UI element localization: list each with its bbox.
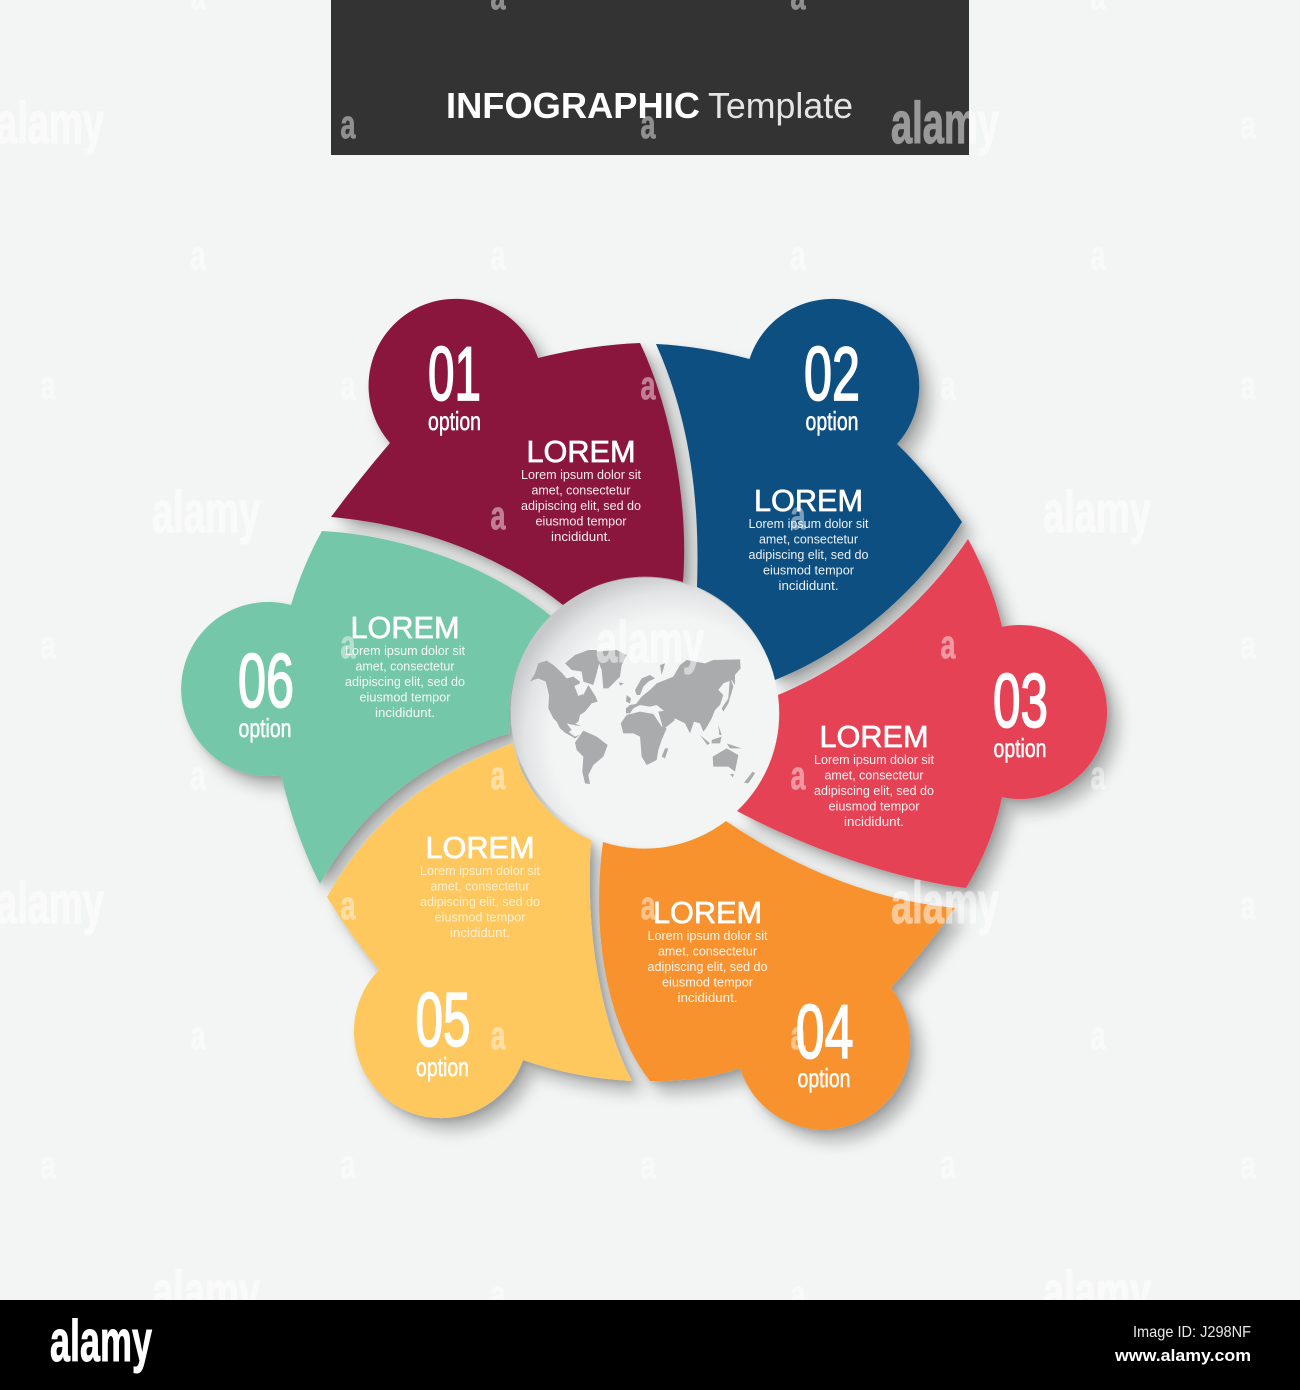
label option: option [994,733,1046,763]
body text: amet, consectetur [824,768,924,782]
body text: adipiscing elit, sed do [521,499,641,513]
heading: LOREM [526,434,636,469]
watermark overlay: a [490,754,506,798]
body text: Lorem ipsum dolor sit [748,517,869,531]
center circle with world map [510,578,778,846]
number 05: 05 [416,978,470,1063]
watermark overlay: a [490,1014,506,1058]
body text: adipiscing elit, sed do [814,784,934,798]
watermark overlay: a [640,103,656,147]
watermark overlay: a [340,103,356,147]
number 03: 03 [993,659,1048,744]
label option: option [798,1063,850,1093]
body text: eiusmod tempor [360,690,450,704]
world map: Americas and Greenland [530,650,627,784]
title: Template [708,85,853,126]
body text: amet, consectetur [430,880,530,894]
watermark overlay: alamy [0,91,104,156]
watermark overlay: a [1240,1143,1256,1187]
number 06: 06 [238,639,294,724]
body text: incididunt. [375,706,435,720]
watermark overlay: a [190,1014,206,1058]
watermark overlay: a [640,884,656,928]
body text: amet, consectetur [759,532,858,546]
heading: LOREM [426,830,534,865]
body text: amet, consectetur [658,944,757,958]
body text: Lorem ipsum dolor sit [345,644,466,658]
body text: adipiscing elit, sed do [748,548,869,562]
watermark overlay: a [1090,754,1106,798]
petal wheel [181,299,1107,1129]
body text: incididunt. [450,926,510,940]
watermark overlay: a [1090,1014,1106,1058]
watermark overlay: a [1240,623,1256,667]
heading: LOREM [820,719,928,754]
body text: Lorem ipsum dolor sit [521,468,642,482]
watermark overlay: a [1240,103,1256,147]
website: www.alamy.com [1114,1346,1251,1365]
label option: option [238,713,292,743]
body text: eiusmod tempor [536,514,626,528]
panel shape 03 [737,539,1107,888]
watermark overlay: a [490,234,506,278]
option 03 [814,659,1048,829]
body text [648,929,768,1005]
body text [420,864,541,940]
body text: amet, consectetur [532,484,630,498]
watermark overlay: a [640,1143,656,1187]
body text: adipiscing elit, sed do [420,895,540,909]
watermark overlay: a [490,494,506,538]
watermark overlay: a [1240,364,1256,408]
body text: Lorem ipsum dolor sit [814,753,935,767]
body text: Lorem ipsum dolor sit [648,929,768,943]
title: INFOGRAPHIC [446,85,700,126]
watermark overlay: a [1090,234,1106,278]
heading: LOREM [653,895,762,930]
body text: eiusmod tempor [828,800,920,814]
watermark overlay: alamy [596,610,704,675]
body text: eiusmod tempor [662,976,753,990]
watermark overlay: a [340,623,356,667]
body text [814,753,935,829]
option 06 [238,610,466,743]
heading: LOREM [350,610,460,645]
panel shape 05 [327,743,632,1118]
watermark overlay: alamy [891,871,999,936]
body text [748,517,869,593]
watermark overlay: a [340,884,356,928]
watermark overlay: alamy [1043,1260,1151,1325]
watermark overlay: a [940,1143,956,1187]
body text: adipiscing elit, sed do [648,960,768,974]
watermark overlay: a [40,364,56,408]
body text: eiusmod tempor [763,564,854,578]
watermark overlay: a [40,623,56,667]
watermark overlay: a [790,1273,806,1317]
label option: option [416,1052,469,1082]
watermark overlay: a [1240,884,1256,928]
watermark overlay: a [940,364,956,408]
body text: amet, consectetur [356,660,454,674]
header banner [331,0,969,155]
panel shape 06 [181,531,552,884]
option 02 [748,332,869,593]
panel shape 04 [599,821,955,1129]
label option: option [428,406,481,436]
panel shape 01 [331,299,684,605]
body text: eiusmod tempor [434,910,526,924]
watermark overlay: a [790,494,806,538]
watermark overlay: a [940,623,956,667]
watermark overlay: a [40,1143,56,1187]
watermark overlay: a [340,364,356,408]
body text: incididunt. [778,579,838,593]
watermark overlay: alamy [891,91,999,156]
body text [521,468,642,544]
watermark overlay: alamy [0,871,104,936]
watermark overlay: a [340,1143,356,1187]
watermark overlay: a [790,754,806,798]
watermark overlay: a [640,364,656,408]
watermark overlay: a [790,1014,806,1058]
watermark overlay: alamy [152,480,260,545]
watermark overlay: alamy [152,1260,260,1325]
panel shape 02 [656,299,962,680]
watermark overlay: a [190,754,206,798]
body text: Lorem ipsum dolor sit [420,864,541,878]
number 01: 01 [428,332,481,417]
image id: Image ID: J298NF [1133,1324,1251,1341]
body text: incididunt. [844,815,904,829]
body text: adipiscing elit, sed do [345,675,465,689]
number 04: 04 [796,990,854,1075]
label option: option [806,406,858,436]
footer bar [0,1300,1300,1390]
watermark overlay: a [790,234,806,278]
number 02: 02 [804,332,860,417]
heading: LOREM [754,483,863,518]
option 05 [416,830,541,1082]
body text: incididunt. [551,530,611,544]
footer logo: alamy [50,1309,152,1374]
body text [345,644,466,720]
watermark overlay: alamy [1043,480,1151,545]
world map: Europe, Africa, Asia, Oceania [621,659,755,783]
option 01 [428,332,642,544]
body text: incididunt. [678,991,738,1005]
watermark overlay: a [490,1273,506,1317]
watermark overlay: a [190,234,206,278]
option 04 [648,895,854,1093]
